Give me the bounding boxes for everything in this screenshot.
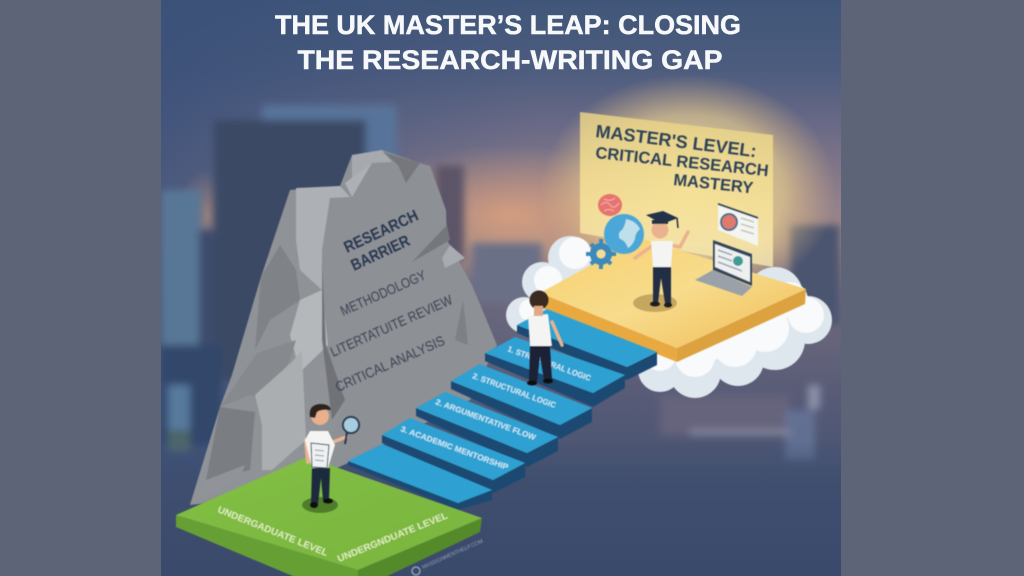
rock inscription: research barrier: RESEARCH — [342, 207, 421, 257]
rock inscription: research barrier — [342, 207, 421, 275]
panel heading: MASTERY — [673, 171, 754, 197]
character: undergraduate with magnifier — [305, 404, 359, 508]
panel heading: MASTER'S LEVEL: — [594, 121, 758, 161]
character: master's graduate — [635, 211, 688, 308]
step 3: argumentative flow — [416, 392, 558, 467]
icon: laptop — [695, 240, 752, 296]
blurred city background — [161, 0, 841, 576]
platform label: UNDERGADUATE LEVEL — [216, 505, 330, 559]
icon: floating report — [718, 203, 758, 246]
panel heading: CRITICAL RESEARCH — [595, 144, 770, 180]
icon: globe — [604, 214, 644, 254]
step 2: structural logic: 2. STRUCTURAL LOGIC — [471, 371, 557, 410]
rock inscription: methodology, literature review, critical analysis: LITERTATUITE REVIEW — [328, 291, 455, 360]
rock: research barrier — [190, 150, 497, 505]
icon: gear — [586, 239, 616, 269]
title: THE UK MASTER’S LEAP: CLOSING — [275, 10, 741, 40]
platform label: UNDERGNDUATE LEVEL — [336, 510, 450, 565]
icon: brain — [598, 194, 622, 216]
rock inscription: methodology, literature review, critical analysis — [328, 266, 455, 395]
rock inscription: research barrier: BARRIER — [349, 232, 413, 275]
master's platform — [540, 238, 806, 362]
step 4: academic mentorship — [382, 418, 525, 493]
golden glow behind the master's panel — [550, 78, 829, 274]
character: climber on steps — [527, 290, 562, 386]
rock inscription: methodology, literature review, critical analysis: CRITICAL ANALYSIS — [333, 332, 447, 395]
step 1: structural logic: 1. STRUCTURAL LOGIC — [506, 344, 592, 383]
step: top landing — [517, 309, 657, 380]
watermark: MASSIGNMENTHELP.COM — [421, 538, 484, 571]
master's glowing panel — [580, 112, 773, 267]
step 4: academic mentorship: 3. ACADEMIC MENTORSHIP — [399, 424, 510, 472]
undergraduate platform — [176, 457, 482, 576]
step 1: structural logic — [485, 337, 625, 407]
step: bottom blank — [348, 444, 492, 510]
cloud under master's platform — [506, 236, 832, 398]
rock inscription: methodology, literature review, critical analysis: METHODOLOGY — [338, 266, 429, 319]
title — [275, 10, 741, 75]
title: THE RESEARCH-WRITING GAP — [298, 45, 722, 75]
step 3: argumentative flow: 2. ARGUMENTATIVE FLOW — [434, 397, 537, 442]
stairs — [348, 309, 657, 510]
step 2: structural logic — [451, 364, 592, 439]
panel heading — [594, 121, 770, 197]
